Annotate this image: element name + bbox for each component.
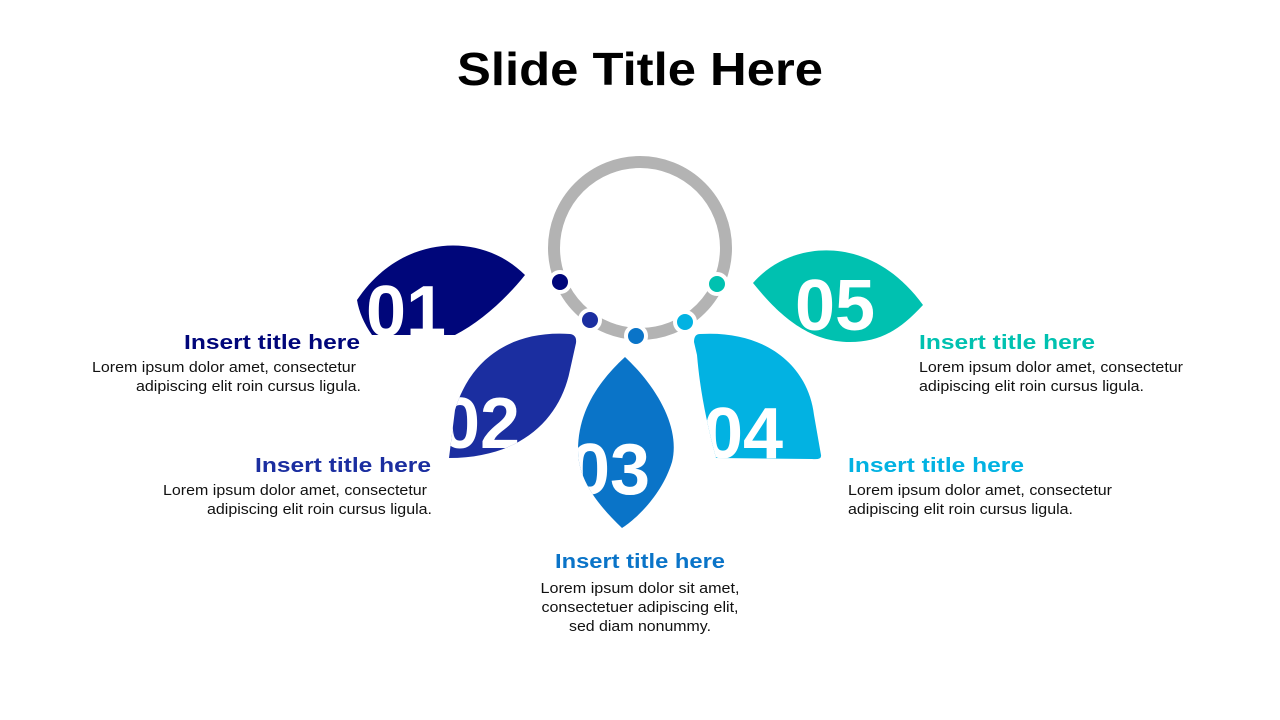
petal 04 (694, 334, 822, 460)
text block 01: adipiscing elit roin cursus ligula. (136, 378, 361, 395)
text block 01: Insert title here (184, 332, 360, 354)
petal 04: 04 (703, 394, 783, 474)
petal 03 (578, 357, 674, 528)
petal 03: 03 (570, 430, 650, 510)
text block 02 (163, 455, 432, 518)
text block 02: Insert title here (255, 455, 431, 477)
text block 03: Lorem ipsum dolor sit amet, (540, 580, 740, 597)
ring (554, 162, 726, 334)
text block 03: consectetuer adipiscing elit, (542, 599, 738, 616)
petal 02 (449, 334, 576, 458)
text block 02: Lorem ipsum dolor amet, consectetur (163, 482, 427, 499)
petal 05 (753, 250, 923, 342)
petal 01: 01 (366, 272, 446, 352)
text block 05: Lorem ipsum dolor amet, consectetur (919, 359, 1183, 376)
text block 04: adipiscing elit roin cursus ligula. (848, 501, 1073, 518)
text block 01 (92, 332, 361, 395)
petal 01 (357, 246, 525, 335)
petal 02: 02 (440, 384, 520, 464)
text block 03: Insert title here (555, 551, 725, 573)
dots on ring (550, 272, 727, 346)
title: Slide Title Here (457, 43, 823, 95)
text block 04 (848, 455, 1112, 518)
text block 03 (540, 551, 740, 635)
text block 02: adipiscing elit roin cursus ligula. (207, 501, 432, 518)
petal 05: 05 (795, 266, 875, 346)
text block 05 (919, 332, 1183, 395)
text block 05: Insert title here (919, 332, 1095, 354)
text block 04: Lorem ipsum dolor amet, consectetur (848, 482, 1112, 499)
text block 01: Lorem ipsum dolor amet, consectetur (92, 359, 356, 376)
text block 03: sed diam nonummy. (569, 618, 711, 635)
text block 05: adipiscing elit roin cursus ligula. (919, 378, 1144, 395)
text block 04: Insert title here (848, 455, 1024, 477)
